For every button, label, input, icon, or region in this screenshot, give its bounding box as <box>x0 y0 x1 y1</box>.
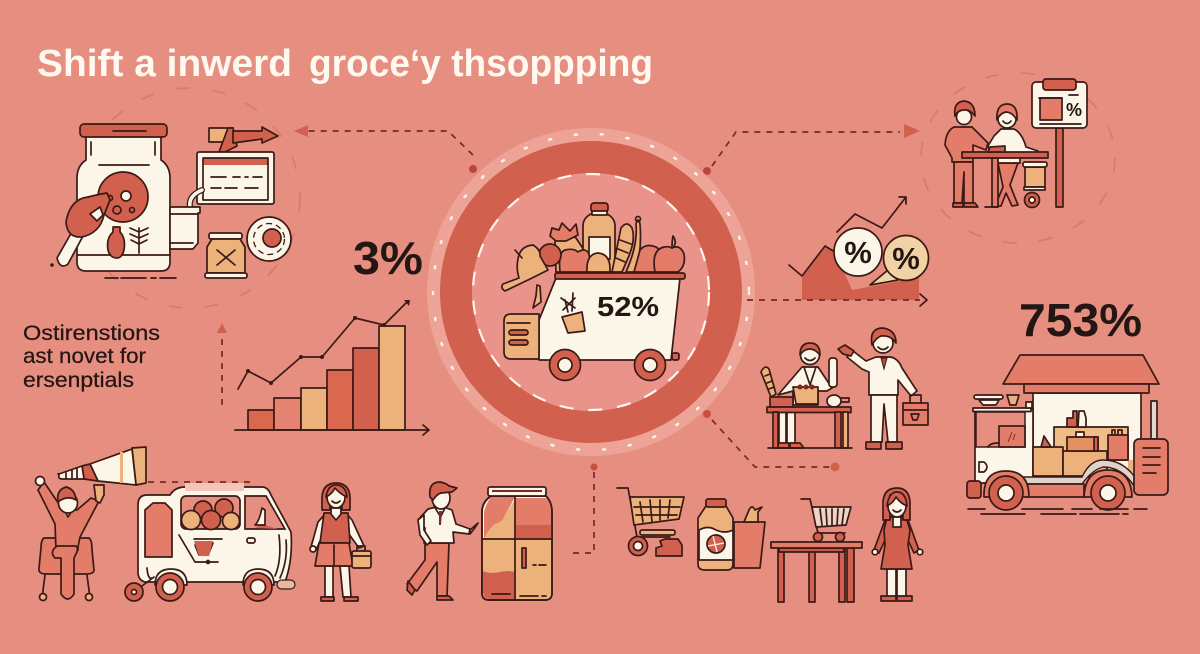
icon: large jar <box>77 124 176 278</box>
text block: essentials: ersenptials <box>23 369 134 392</box>
title: Shift a inwerd <box>37 43 292 85</box>
panel: central circle <box>427 128 755 456</box>
icon: counter table <box>962 146 1048 207</box>
icon: truck box <box>504 273 685 380</box>
icon: buyer <box>838 328 928 449</box>
stat: 52%: 52% <box>597 291 659 322</box>
dashed connector: top left <box>294 125 477 173</box>
icon: megaphone <box>58 447 146 485</box>
text block: essentials: Ostirenstions <box>23 322 160 345</box>
icon: donut <box>247 217 291 261</box>
dashed connector: top right <box>703 124 920 175</box>
icon: counter cart <box>1023 162 1047 208</box>
panel: discount chart: % <box>844 235 872 270</box>
icon: van wheels <box>125 569 274 601</box>
icon: magnifier hand <box>50 193 110 267</box>
panel: shopper with megaphone <box>36 447 146 600</box>
icon: small jar <box>205 233 247 278</box>
icon: groceries <box>502 203 684 308</box>
panel: seller and buyer <box>761 328 928 449</box>
icon: cup with tube <box>170 190 202 249</box>
icon: arrow card <box>197 127 278 204</box>
stat: 3%: 3% <box>353 232 423 284</box>
icon: sign with percent: % <box>1066 100 1082 120</box>
icon: sign with percent <box>1032 79 1087 207</box>
panel: delivery truck with shop <box>967 355 1168 514</box>
text block: essentials <box>23 322 160 392</box>
text block: essentials: ast novet for <box>23 345 146 368</box>
dashed arrow: up to jar <box>217 323 227 405</box>
title: groce‘y thsoppping <box>309 43 653 85</box>
icon: person seated <box>36 476 104 600</box>
icon: van body <box>138 487 295 589</box>
stat: 753%: 753% <box>1019 294 1142 346</box>
bar chart <box>235 300 429 435</box>
icon: woman in dress <box>872 488 923 601</box>
icon: boxes and bottles <box>1033 411 1133 478</box>
icon: woman at counter <box>988 104 1038 206</box>
panel: jar illustration <box>50 88 300 308</box>
panel: people at counter <box>921 73 1115 243</box>
title <box>37 43 653 85</box>
panel: discount chart: % <box>892 241 920 276</box>
panel: food van <box>125 482 295 601</box>
icon: tall jar <box>482 487 552 600</box>
icon: chassis and wheels <box>967 401 1168 514</box>
icon: shopping cart with items <box>617 488 684 556</box>
icon: woman with bag <box>310 483 371 601</box>
icon: man at counter <box>945 101 988 207</box>
icon: seller <box>761 343 852 448</box>
dashed connector: bottom <box>568 464 598 553</box>
dashed connector: lower right <box>703 410 840 472</box>
icon: bottle with basket <box>698 499 765 570</box>
icon: man with cap <box>407 482 478 600</box>
panel: discount chart <box>747 197 928 306</box>
icon: table with cart <box>771 499 862 602</box>
icon: cab <box>973 395 1033 483</box>
